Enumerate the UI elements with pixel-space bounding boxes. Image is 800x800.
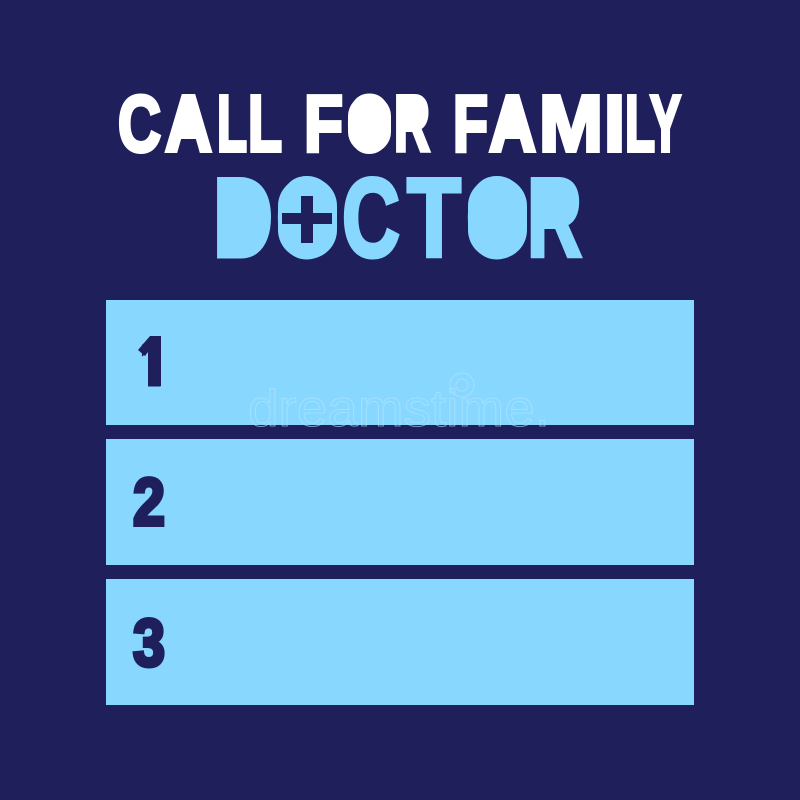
title: call for family: Y — [650, 79, 681, 168]
heading: doctor: R — [527, 156, 582, 280]
title: call for family: F — [453, 79, 488, 168]
watermark: dreamstime. — [248, 380, 550, 438]
icon: medical cross — [282, 196, 332, 243]
title: call for family: M — [539, 79, 603, 168]
heading: doctor: O — [466, 156, 528, 280]
panel: row 2 — [106, 439, 694, 565]
numbers — [128, 324, 176, 681]
panel: row 1 — [106, 300, 694, 425]
heading: doctor: O — [276, 156, 338, 280]
heading: doctor: C — [342, 156, 400, 280]
title: call for family: I — [604, 79, 625, 168]
title: call for family: F — [304, 79, 343, 168]
heading: doctor: T — [407, 156, 461, 280]
title: call for family: A — [165, 79, 212, 168]
numbers: 3 — [133, 606, 165, 681]
panel: row 3 — [106, 579, 694, 705]
heading: doctor: D — [213, 156, 273, 280]
title: call for family: L — [248, 79, 282, 168]
title: call for family: O — [347, 79, 392, 168]
numbers: 1 — [140, 324, 168, 400]
title: call for family — [118, 79, 681, 168]
heading: doctor — [213, 156, 582, 280]
title: call for family: R — [394, 79, 430, 168]
numbers: 2 — [133, 465, 165, 540]
title: call for family: L — [625, 79, 655, 168]
title: call for family: L — [217, 79, 247, 168]
title: call for family: C — [118, 79, 161, 168]
title: call for family: A — [489, 79, 536, 168]
